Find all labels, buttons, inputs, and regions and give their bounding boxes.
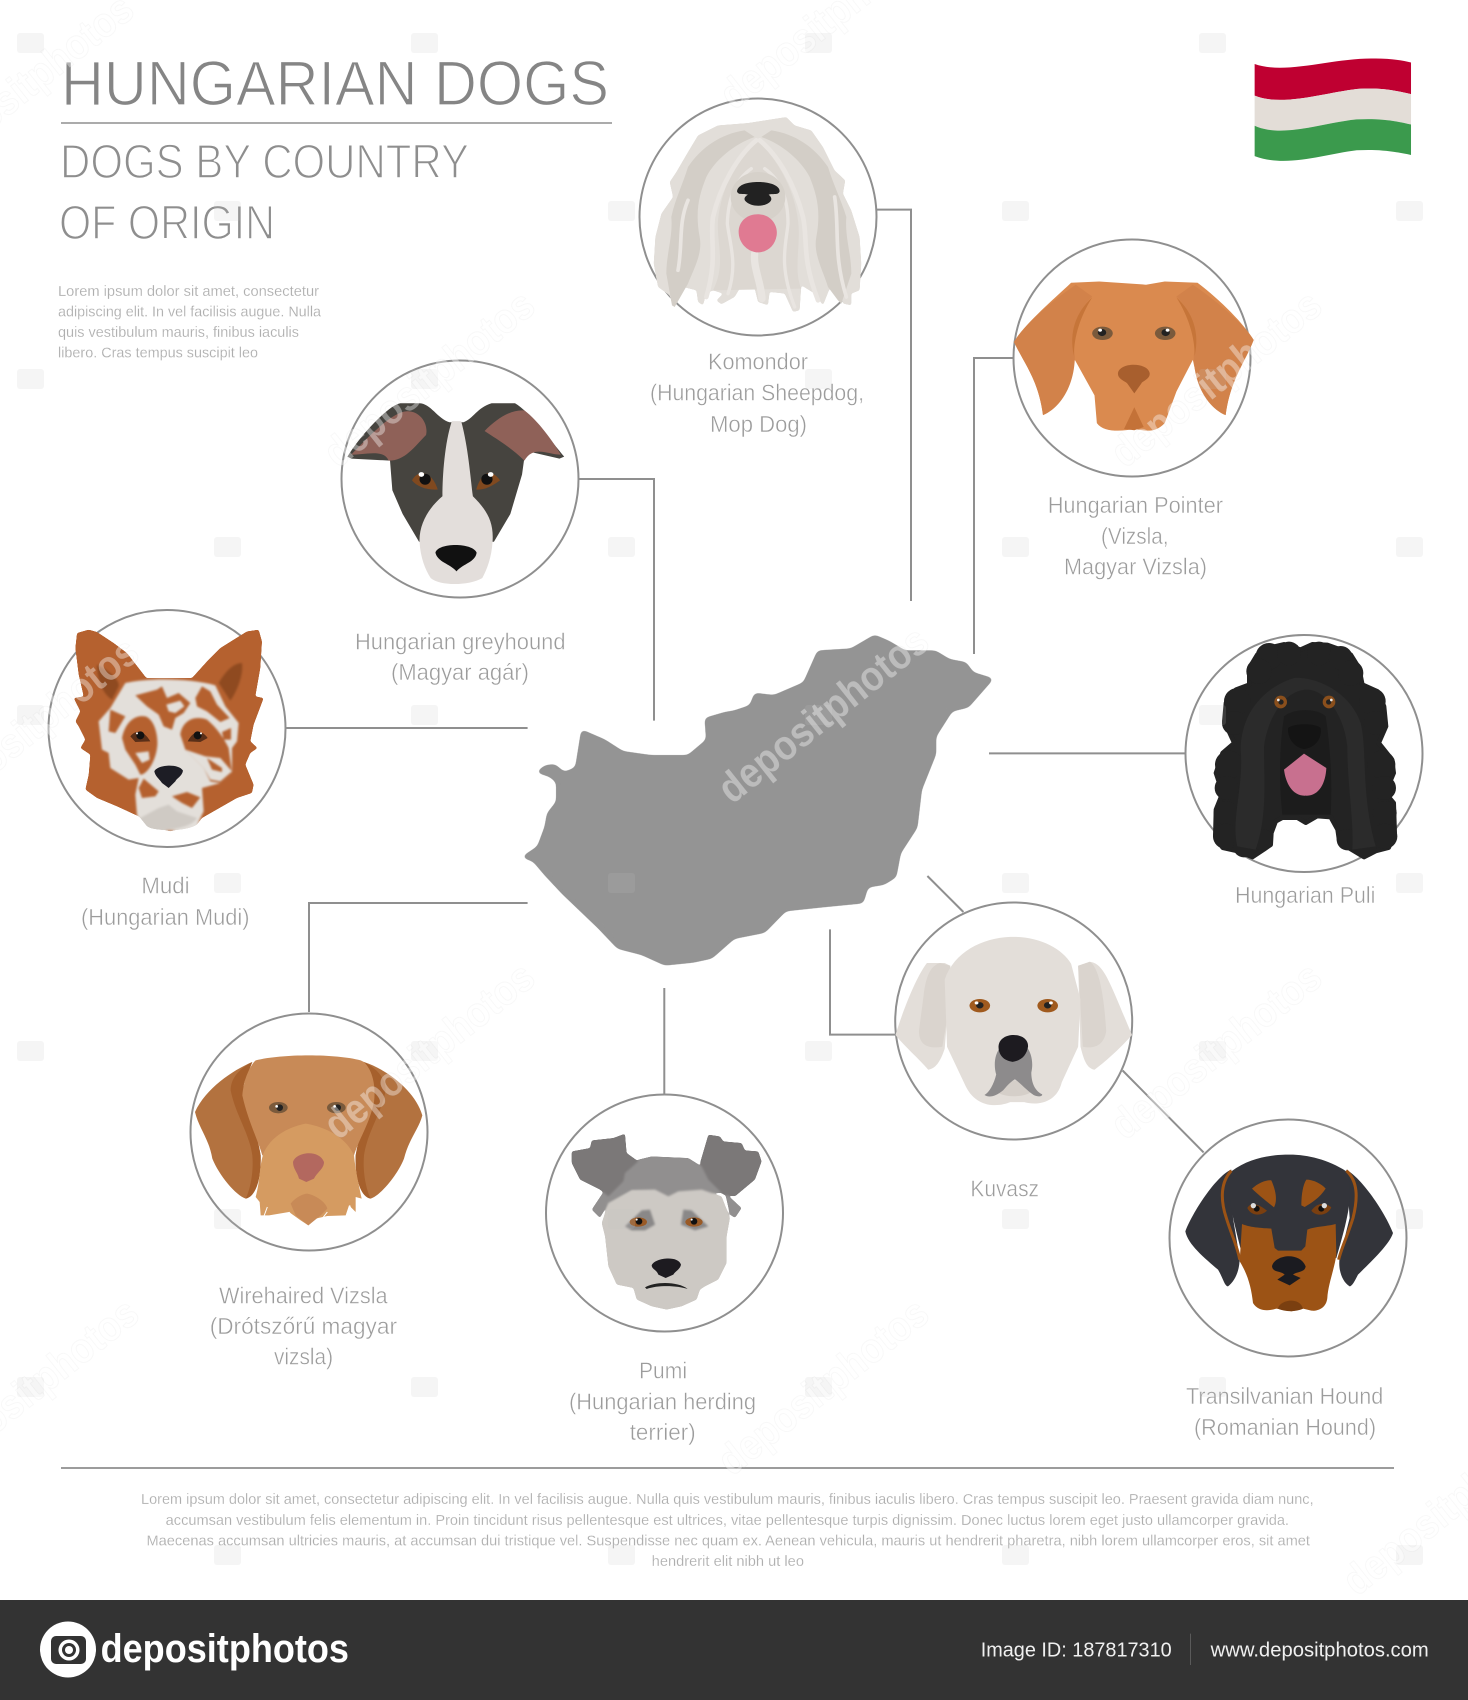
icon: Mudi head: [74, 630, 264, 831]
label: Hungarian greyhound: (Magyar agár): [391, 659, 529, 685]
label: Hungarian Puli: Hungarian Puli: [1235, 882, 1375, 908]
icon: Hungarian greyhound head: [347, 403, 564, 584]
label: Wirehaired Vizsla: vizsla): [274, 1344, 333, 1370]
panel: Hungarian Puli: [1186, 635, 1422, 908]
subtitle: [59, 136, 469, 250]
label: Hungarian Pointer: Hungarian Pointer: [1048, 492, 1223, 518]
panel: Komondor: [640, 98, 876, 437]
label: Komondor: (Hungarian Sheepdog,: [650, 380, 864, 406]
footer bar: [0, 1600, 1468, 1700]
label: Pumi: Pumi: [639, 1358, 687, 1384]
panel: Pumi: [546, 1094, 783, 1445]
label: Transilvanian Hound: (Romanian Hound): [1194, 1414, 1376, 1440]
subtitle: OF ORIGIN: [59, 197, 275, 250]
icon: Hungarian flag: [1255, 58, 1411, 161]
label: Komondor: [650, 348, 864, 437]
watermark overlay: depositphotos: [708, 1289, 937, 1484]
label: Wirehaired Vizsla: (Drótszőrű magyar: [210, 1313, 397, 1339]
label: Hungarian Pointer: (Vizsla,: [1101, 523, 1168, 549]
map of Hungary: [523, 636, 992, 965]
label: Transilvanian Hound: Transilvanian Hound: [1186, 1383, 1383, 1409]
subtitle: DOGS BY COUNTRY: [60, 136, 469, 189]
intro text block: Lorem ipsum dolor sit amet, consectetur: [58, 284, 319, 300]
watermark overlay: depositphotos: [1101, 281, 1330, 476]
icon: Wirehaired Vizsla head: [195, 1055, 422, 1225]
website url: www.depositphotos.com: [1210, 1640, 1429, 1662]
bottom text block: [141, 1492, 1314, 1570]
label: Pumi: terrier): [630, 1419, 696, 1445]
label: Mudi: [81, 872, 250, 930]
label: Transilvanian Hound: [1186, 1383, 1383, 1440]
panel: Transilvanian Hound: [1170, 1120, 1406, 1440]
icon: Hungarian Puli head: [1213, 642, 1397, 857]
label: Pumi: (Hungarian herding: [569, 1388, 756, 1414]
label: Hungarian Pointer: [1048, 492, 1223, 580]
panel: Hungarian Pointer: [1014, 240, 1254, 580]
logo wordmark: depositphotos: [101, 1627, 349, 1671]
label: Komondor: Mop Dog): [710, 411, 807, 437]
label: Komondor: Komondor: [708, 348, 808, 374]
bottom text block: Maecenas accumsan ultricies mauris, at accumsan dui tristique vel. Suspendisse nec quam ex. Aenean vehicula, mauris ut hendrerit pharetra, nibh lorem ullamcorper eros, sit amet: [146, 1534, 1310, 1550]
intro text block: adipiscing elit. In vel facilisis augue. Nulla: [58, 304, 322, 320]
watermark overlay: depositphotos: [314, 953, 543, 1148]
watermark overlay: depositphotos: [708, 617, 937, 812]
label: Pumi: [569, 1358, 756, 1445]
panel: Wirehaired Vizsla: [190, 1014, 428, 1370]
panel: Hungarian greyhound: [342, 360, 578, 685]
intro text block: libero. Cras tempus suscipit leo: [58, 346, 258, 362]
icon: depositphotos logo: [40, 1622, 96, 1678]
intro text block: quis vestibulum mauris, finibus iaculis: [58, 325, 299, 341]
label: Mudi: Mudi: [141, 872, 190, 898]
title: HUNGARIAN DOGS: [61, 49, 609, 119]
watermark overlay: depositphotos: [314, 281, 543, 476]
label: Hungarian greyhound: Hungarian greyhound: [355, 628, 566, 654]
intro text block: [58, 284, 322, 362]
panel: Kuvasz: [895, 902, 1132, 1201]
icon: Kuvasz head: [896, 937, 1132, 1105]
label: Hungarian Pointer: Magyar Vizsla): [1064, 554, 1207, 580]
label: Hungarian greyhound: [355, 628, 566, 685]
bottom text block: hendrerit elit nibh ut leo: [652, 1554, 804, 1570]
watermark overlay: depositphotos: [1101, 953, 1330, 1148]
connectors: breed circles to map: [286, 210, 1204, 1152]
image id: Image ID: 187817310: [981, 1640, 1172, 1662]
icon: Hungarian Pointer head: [1014, 282, 1254, 431]
label: Wirehaired Vizsla: [210, 1282, 397, 1370]
bottom text block: accumsan vestibulum felis elementum in. Proin tincidunt risus pellentesque est ultrices, vitae pellentesque turpis dignissim. Donec luctus lorem eget justo ullamcorper gravida.: [166, 1513, 1289, 1529]
icon: Transilvanian Hound head: [1185, 1155, 1393, 1311]
label: Wirehaired Vizsla: Wirehaired Vizsla: [219, 1282, 388, 1308]
bottom text block: Lorem ipsum dolor sit amet, consectetur adipiscing elit. In vel facilisis augue. Nulla quis vestibulum mauris, finibus iaculis libero. Cras tempus suscipit leo. Praesent gravida diam nunc,: [141, 1492, 1314, 1508]
icon: Pumi head: [572, 1134, 762, 1310]
icon: Komondor head: [654, 117, 861, 312]
label: Mudi: (Hungarian Mudi): [81, 904, 250, 930]
label: Kuvasz: Kuvasz: [970, 1175, 1039, 1201]
panel: Mudi: [48, 610, 286, 930]
